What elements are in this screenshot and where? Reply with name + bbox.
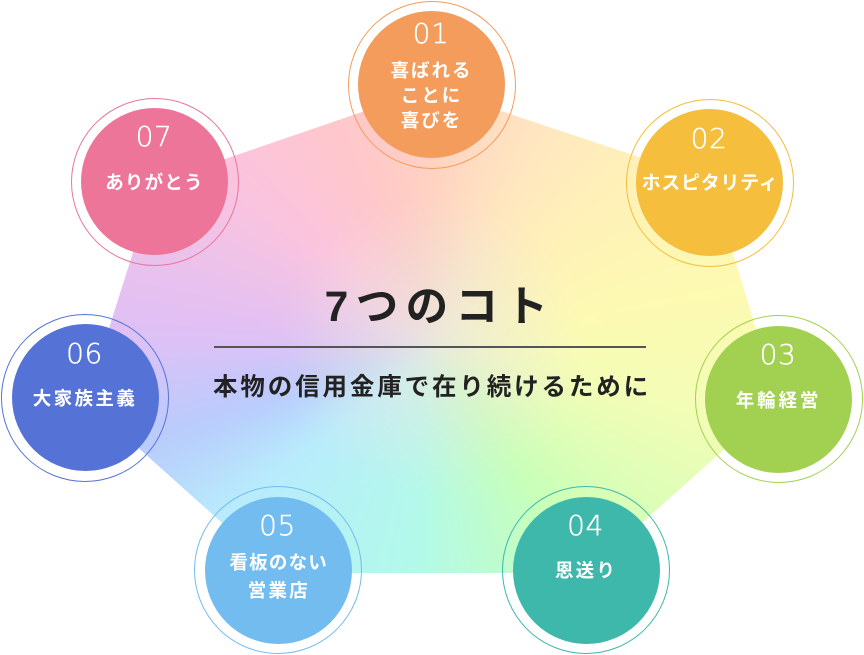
circle 02: ホスピタリティ bbox=[642, 173, 778, 194]
circle 03: 03 bbox=[760, 338, 796, 370]
circle 01 bbox=[358, 11, 505, 158]
circle 03 bbox=[705, 326, 852, 472]
circle 03: 年輪経営 bbox=[736, 390, 821, 410]
circle 05: 05 bbox=[259, 508, 296, 542]
circle 05 bbox=[204, 496, 352, 644]
circle 07: 07 bbox=[136, 120, 172, 152]
circle 01: ことに bbox=[401, 85, 462, 106]
circle 04 bbox=[512, 496, 660, 644]
circle 06: 06 bbox=[66, 336, 103, 370]
circle 01: 喜ばれる bbox=[390, 60, 472, 81]
circle 07 bbox=[81, 108, 228, 255]
circle 01: 喜びを bbox=[401, 110, 462, 131]
circle 06 bbox=[12, 324, 158, 471]
circle 06: 大家族主義 bbox=[33, 388, 137, 408]
title: 7つのコト bbox=[325, 284, 555, 331]
circle 04: 04 bbox=[567, 508, 604, 542]
circle 05: 営業店 bbox=[248, 580, 310, 601]
circle 07: ありがとう bbox=[105, 172, 204, 192]
circle 01: 01 bbox=[413, 17, 449, 50]
circle 02: 02 bbox=[691, 122, 727, 155]
circle 02 bbox=[636, 109, 783, 256]
circle 05: 看板のない bbox=[229, 552, 328, 573]
subtitle: 本物の信用金庫で在り続けるために bbox=[213, 374, 651, 401]
circle 04: 恩送り bbox=[555, 560, 617, 580]
heptagon gradient background bbox=[109, 110, 756, 573]
divider line bbox=[214, 346, 646, 348]
